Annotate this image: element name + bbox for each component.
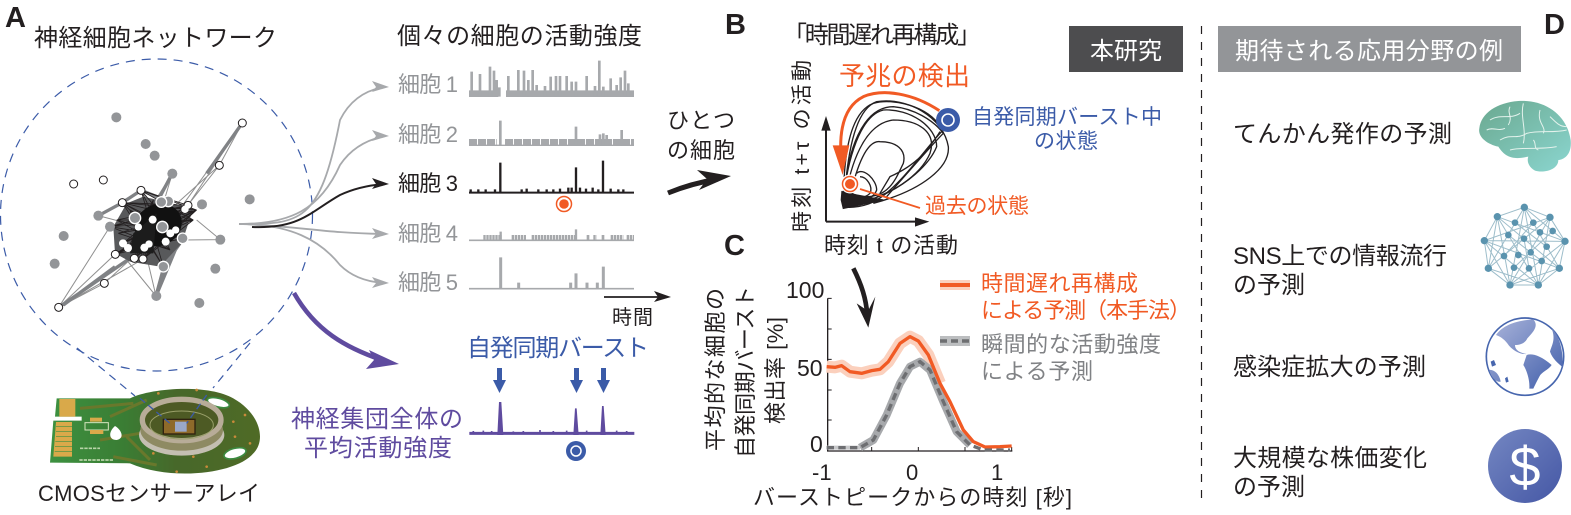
label: population average activity: 神経集団全体の: [291, 406, 463, 433]
label: population average activity: [291, 406, 463, 462]
badge: this study: [1069, 26, 1183, 72]
text: epilepsy prediction: てんかん発作の予測: [1233, 121, 1452, 148]
text: SNS trend prediction: [1233, 243, 1447, 299]
label: state during burst: 自発同期バースト中: [972, 106, 1162, 129]
activity traces of cells: [469, 61, 634, 289]
y axis label: 検出率 [%]: [763, 317, 788, 424]
heading: time-delay reconstruction: 「時間遅れ再構成」: [783, 22, 981, 49]
axis tick labels: -1: [812, 460, 832, 485]
heading: expected applications: [1218, 26, 1521, 72]
legend: instantaneous activity: 瞬間的な活動強度: [981, 332, 1161, 357]
icon: brain: [1479, 101, 1571, 172]
label: state during burst: の状態: [1034, 130, 1098, 153]
heading: neural network: 神経細胞ネットワーク: [34, 25, 277, 52]
cell labels: 細胞 3: [398, 171, 458, 196]
text: one cell: の細胞: [667, 138, 735, 163]
panel letter C: C: [724, 230, 745, 262]
arrow: one cell: [668, 170, 731, 193]
icon: dollar: [1488, 429, 1562, 503]
axes: [821, 116, 929, 227]
heading: activity of each cell: 個々の細胞の活動強度: [397, 23, 642, 50]
cell labels: 細胞 4: [398, 221, 458, 246]
cell labels: 細胞 5: [398, 270, 458, 295]
marker: blue target: [566, 441, 586, 461]
label: detect precursor: 予兆の検出: [839, 61, 970, 91]
label: state during burst: [972, 106, 1162, 153]
axis tick labels: 50: [797, 355, 823, 381]
y axis label: 自発同期バースト: [733, 286, 758, 458]
divider: [1200, 26, 1202, 500]
axis tick labels: 0: [906, 460, 918, 485]
axis tick labels: [786, 277, 1003, 485]
label: past state: 過去の状態: [925, 195, 1029, 218]
legend: proposed method: [940, 271, 1191, 323]
dashed network circle: [0, 59, 312, 371]
text: epidemic prediction: 感染症拡大の予測: [1233, 354, 1426, 381]
x axis label: 時刻 t の活動: [824, 233, 958, 258]
label: time: 時間: [612, 306, 653, 329]
label: population average activity: 平均活動強度: [304, 435, 452, 462]
panel: A neural network and activity: [0, 2, 671, 506]
axis tick labels: 100: [786, 277, 824, 303]
axis tick labels: 1: [991, 460, 1003, 485]
down arrow: [853, 268, 875, 328]
photo: CMOS sensor array: [50, 389, 260, 474]
legend: instantaneous activity: [940, 332, 1161, 384]
cell labels: 細胞 2: [398, 122, 458, 147]
trace: population average: [469, 402, 634, 435]
text: SNS trend prediction: SNS上での情報流行: [1233, 243, 1447, 270]
panel: C detection rate chart: [703, 230, 1191, 510]
y axis label: [703, 286, 788, 458]
marker: past state: [840, 174, 860, 194]
legend: proposed method: による予測（本手法）: [981, 298, 1191, 323]
text: SNS trend prediction: の予測: [1233, 272, 1305, 299]
cell labels: 細胞 1: [398, 72, 458, 97]
x axis label: バーストピークからの時刻 [秒]: [753, 485, 1072, 510]
text: stock change prediction: 大規模な株価変化: [1233, 445, 1427, 472]
legend: instantaneous activity: による予測: [981, 359, 1093, 384]
y axis label: 平均的な細胞の: [703, 288, 728, 451]
panel letter D: D: [1544, 9, 1565, 41]
arrow: orange precursor arrow: [833, 93, 939, 175]
label: CMOS sensor array: CMOSセンサーアレイ: [38, 481, 260, 506]
time arrow: [604, 291, 671, 302]
y axis label: 時刻 t+τ の活動: [791, 60, 814, 232]
text: one cell: [667, 108, 735, 163]
text: stock change prediction: の予測: [1233, 474, 1305, 501]
text: one cell: ひとつ: [667, 108, 735, 133]
panel: D application examples: [1218, 9, 1571, 503]
branching arrows to cells: [239, 81, 389, 288]
network graph: [50, 112, 255, 311]
burst arrows: [493, 368, 610, 393]
zoom dashed guide lines: [77, 343, 250, 396]
leader line: past state: [860, 189, 920, 208]
marker: burst state: [936, 108, 960, 132]
marker: orange target on cell 3: [556, 196, 572, 212]
phase plot trajectories: [841, 101, 948, 208]
legend: proposed method: 時間遅れ再構成: [981, 271, 1138, 296]
text: stock change prediction: [1233, 445, 1427, 501]
icon: globe: [1486, 318, 1564, 395]
purple arrow: [294, 293, 399, 369]
icon: dollar: $: [1509, 435, 1541, 498]
line chart: [827, 298, 1012, 451]
icon: social network: [1481, 204, 1569, 289]
badge: this study: 本研究: [1090, 38, 1162, 65]
heading: expected applications: 期待される応用分野の例: [1235, 38, 1503, 65]
cell labels: [398, 72, 458, 295]
axis tick labels: 0: [810, 431, 823, 457]
label: spontaneous synchronous burst: 自発同期バースト: [467, 335, 649, 362]
panel letter A: A: [5, 2, 26, 34]
panel: B time-delay reconstruction: [725, 9, 1183, 258]
panel letter B: B: [725, 9, 746, 41]
